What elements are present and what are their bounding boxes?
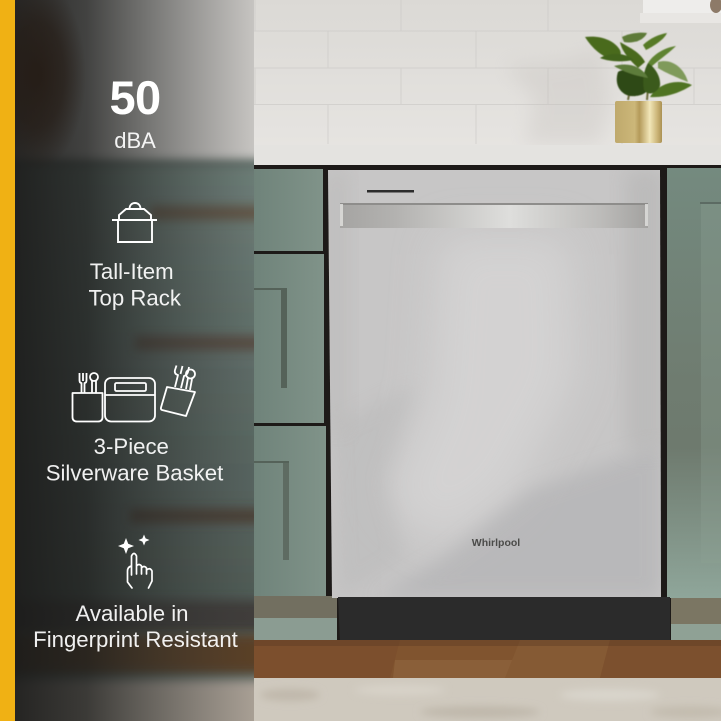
- kick plate: [338, 597, 670, 641]
- blurred upper wall: [23, 0, 254, 165]
- handle: [340, 203, 648, 228]
- icon: pot: [112, 203, 157, 242]
- top drawer: [254, 169, 323, 251]
- yellow accent bar: [0, 0, 15, 721]
- upper cabinet corner: [640, 0, 721, 23]
- rug: [254, 678, 721, 721]
- feature: 50 dBA: 50: [109, 71, 161, 124]
- feature: 3-piece silverware basket: 3-Piece: [94, 434, 169, 459]
- feature: 3-piece silverware basket: Silverware Basket: [46, 461, 223, 486]
- cabinet recess: [254, 165, 721, 641]
- feature: fingerprint resistant: Available in: [75, 601, 189, 626]
- potted plant: [585, 33, 692, 143]
- dark shade: [15, 0, 254, 721]
- toe kick: [254, 596, 337, 641]
- feature: tall-item top rack: [88, 203, 182, 310]
- feature: fingerprint resistant: [33, 534, 238, 652]
- wall of white tiles: [254, 0, 721, 146]
- icon: sparkles and hand: [118, 534, 152, 588]
- blurred rug: [28, 674, 254, 721]
- door: [328, 170, 661, 598]
- leaves: [585, 33, 692, 100]
- lower drawer: [254, 426, 326, 596]
- feature: 50 dBA: dBA: [114, 128, 156, 153]
- feature: 50 dBA: [109, 71, 161, 153]
- panel base: [22, 152, 254, 688]
- feature: fingerprint resistant: Fingerprint Resistant: [33, 627, 238, 652]
- blurred cabinets: [104, 166, 254, 394]
- middle drawer: [254, 254, 324, 423]
- feature: tall-item top rack: Tall-Item: [90, 259, 174, 284]
- gold pot: [615, 101, 662, 143]
- feature: tall-item top rack: Top Rack: [88, 286, 182, 310]
- left cabinets: [254, 169, 337, 641]
- right cabinet: [667, 168, 721, 644]
- floor: [254, 640, 721, 678]
- door light sheen: [325, 170, 665, 598]
- countertop: [254, 145, 721, 166]
- feature: 3-piece silverware basket: [46, 366, 223, 486]
- icon: silverware baskets: [72, 366, 195, 422]
- brand logo: Whirlpool: [472, 537, 520, 549]
- control slot: [367, 190, 414, 192]
- dishwasher: [325, 170, 670, 641]
- blurred glass panel: [15, 0, 254, 721]
- blurred floor: [88, 597, 254, 634]
- blurred drawer pulls: [150, 206, 265, 220]
- blurred dark shape top left: [15, 1, 79, 150]
